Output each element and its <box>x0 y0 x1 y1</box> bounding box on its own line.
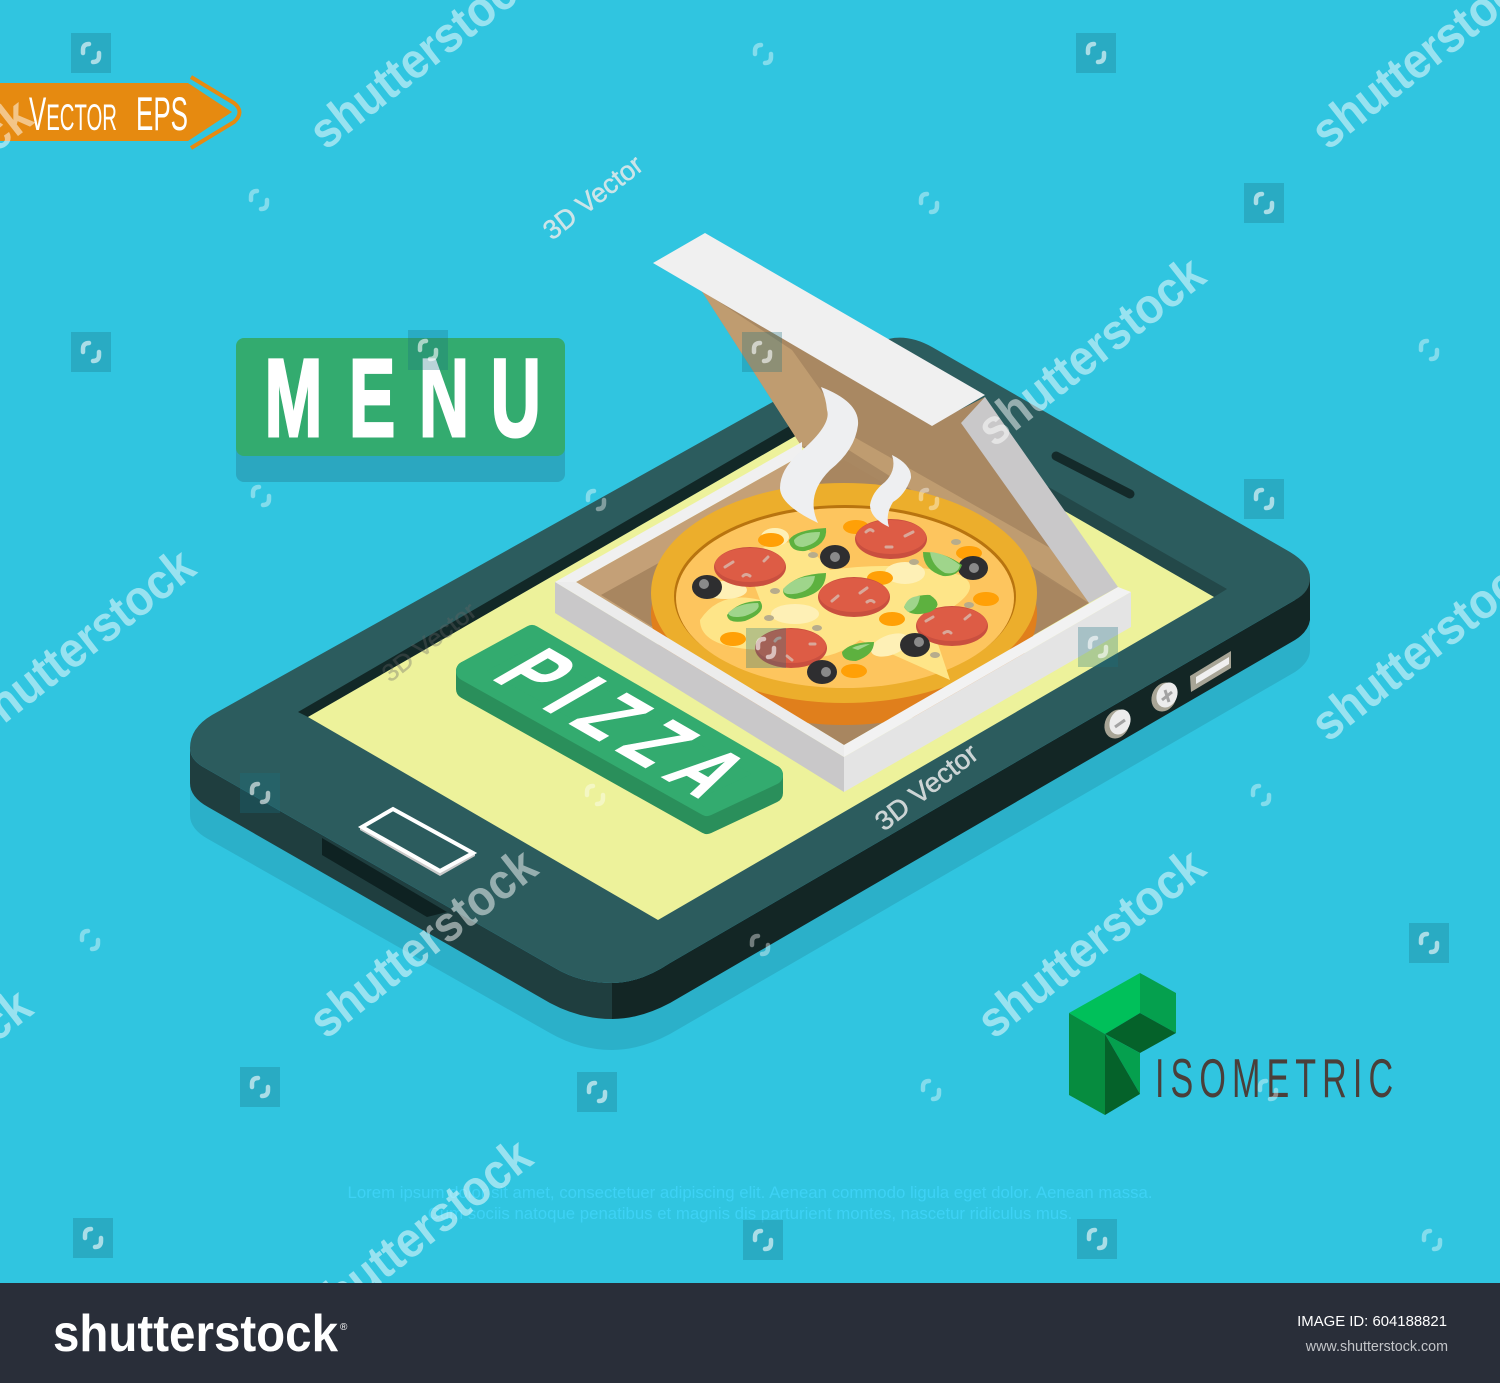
side USB port <box>1190 651 1231 692</box>
image id: IMAGE ID: 604188821 <box>1297 1314 1447 1330</box>
footer url: www.shutterstock.com <box>1305 1339 1448 1355</box>
placeholder caption: Cum sociis natoque penatibus et magnis dis parturient montes, nascetur ridiculus mus. <box>428 1204 1072 1223</box>
lid inner left face <box>701 290 854 447</box>
phone side right <box>612 578 1310 1019</box>
lid side flap <box>961 397 1118 603</box>
sign panel <box>236 338 565 456</box>
phone <box>190 338 1310 1050</box>
placeholder caption <box>347 1183 1153 1223</box>
footer bar <box>0 1283 1500 1383</box>
screen <box>308 396 1214 920</box>
shutterstock watermarks: shutterstock <box>966 245 1215 457</box>
pizza box back <box>555 233 1118 745</box>
footer background <box>0 1283 1500 1383</box>
box left wall <box>555 582 844 792</box>
3D Vector labels <box>377 149 984 837</box>
screen recess left <box>298 382 865 717</box>
melted cheese <box>700 542 970 680</box>
phone shadow <box>190 600 1310 1050</box>
button side <box>466 671 773 824</box>
phone top face <box>190 338 1310 983</box>
steam large <box>780 387 858 523</box>
footer registered mark: ® <box>340 1322 348 1333</box>
phone side left <box>190 748 612 1019</box>
box floor <box>601 460 1089 745</box>
isometric logo <box>1069 973 1393 1115</box>
shutterstock watermarks: shutterstock <box>298 837 547 1049</box>
button label: PIZZA <box>473 636 773 809</box>
box rim left <box>555 582 844 757</box>
shutterstock watermarks: shutterstock <box>966 837 1215 1049</box>
pizza box front <box>555 582 1131 792</box>
MENU sign <box>236 338 565 482</box>
pizza <box>651 483 1037 725</box>
screen recess right <box>865 382 1227 597</box>
button top <box>466 635 773 806</box>
ribbon label: EPS <box>136 87 188 140</box>
shutterstock watermarks: shutterstock <box>293 1127 542 1339</box>
crust inner line <box>674 505 1016 687</box>
speaker slot <box>1056 456 1130 494</box>
PIZZA button <box>466 635 773 824</box>
cheese highlights <box>703 528 925 661</box>
box rim back <box>555 442 802 582</box>
logo wordmark: ISOMETRIC <box>1155 1048 1393 1109</box>
ribbon chevron <box>191 77 240 148</box>
lid inner face <box>701 290 1089 603</box>
3D Vector labels: 3D Vector <box>377 597 482 688</box>
3D Vector labels: 3D Vector <box>869 738 984 837</box>
box right wall <box>844 592 1131 792</box>
crust top <box>651 483 1037 703</box>
ribbon label: VECTOR <box>29 87 117 140</box>
placeholder caption: Lorem ipsum dolor sit amet, consectetuer adipiscing elit. Aenean commodo ligula eget dolor. Aenean massa. <box>347 1183 1153 1202</box>
sign shadow <box>236 430 565 482</box>
side button plus <box>1147 678 1182 716</box>
pepperoni <box>714 519 988 668</box>
3D Vector labels: 3D Vector <box>537 149 649 246</box>
orange toppings <box>720 520 999 678</box>
cheese base <box>676 508 1014 688</box>
footer logo: shutterstock <box>53 1305 338 1363</box>
home button <box>360 809 475 876</box>
side button minus <box>1100 705 1135 743</box>
Vector EPS ribbon <box>0 77 240 148</box>
charging slot <box>322 838 447 917</box>
sign label: MENU <box>265 338 541 460</box>
box rim right <box>844 587 1131 757</box>
box interior walls <box>576 455 1089 745</box>
steam <box>780 387 911 527</box>
olives <box>692 545 988 684</box>
logo mark <box>1069 973 1176 1115</box>
steam small <box>870 455 911 527</box>
gray seeds <box>764 539 974 658</box>
lid crease stripe <box>844 437 1089 603</box>
ribbon body <box>0 83 232 141</box>
green peppers <box>727 528 962 661</box>
lid front edge <box>653 233 985 426</box>
crust underside <box>651 503 1037 725</box>
